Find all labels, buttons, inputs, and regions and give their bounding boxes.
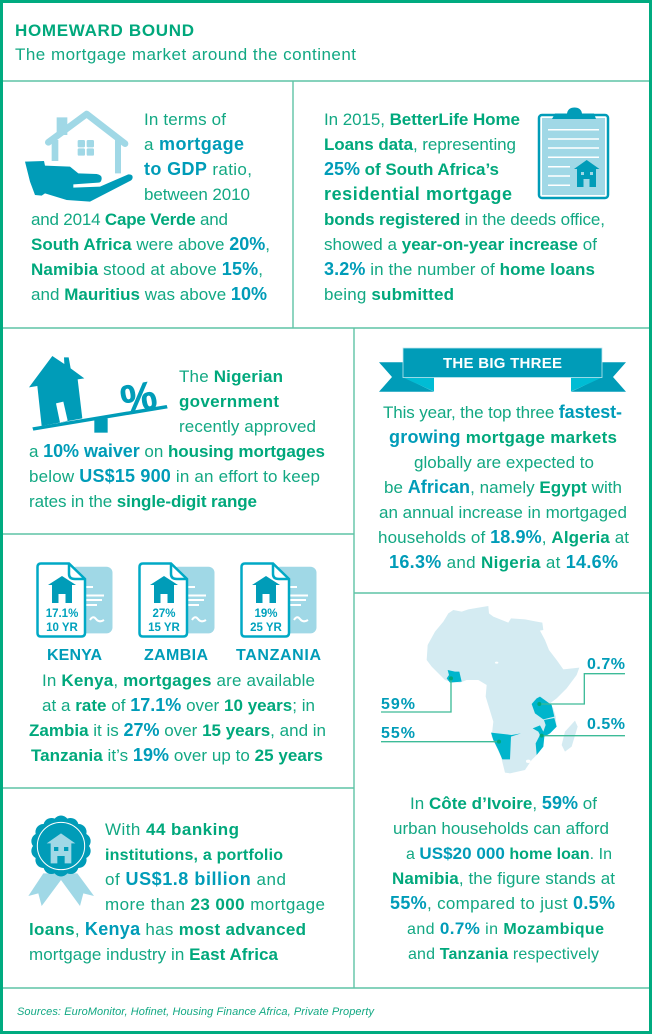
text block: and 0.7% in Mozambique bbox=[407, 919, 604, 938]
text block: growing mortgage markets bbox=[389, 427, 617, 447]
icon: clipboard bbox=[539, 108, 608, 198]
text block: between 2010 bbox=[144, 185, 250, 204]
icon: Tanzania document: 19% bbox=[254, 608, 278, 620]
text block bbox=[324, 110, 605, 304]
text block: a mortgage bbox=[144, 134, 244, 154]
text block: Zambia it is 27% over 15 years, and in bbox=[29, 720, 326, 740]
country labels: TANZANIA bbox=[236, 647, 321, 664]
text block: a 10% waiver on housing mortgages bbox=[29, 441, 325, 461]
icon: Kenya document: 10 YR bbox=[46, 622, 79, 634]
icon: Zambia document: 27% bbox=[152, 608, 176, 620]
text block: and Tanzania respectively bbox=[408, 946, 599, 963]
text block: and 2014 Cape Verde and bbox=[31, 210, 228, 229]
icon: house in hand bbox=[25, 114, 133, 202]
text block: In Kenya, mortgages are available bbox=[42, 671, 315, 690]
text block: globally are expected to bbox=[414, 453, 594, 472]
text block: be African, namely Egypt with bbox=[384, 477, 622, 497]
text block: This year, the top three fastest- bbox=[383, 402, 622, 422]
panel: mortgage to GDP bbox=[25, 110, 270, 304]
text block: Tanzania it’s 19% over up to 25 years bbox=[31, 745, 323, 765]
text block: rates in the single-digit range bbox=[29, 492, 257, 511]
title: HOMEWARD BOUND bbox=[15, 21, 194, 40]
text block: an annual increase in mortgaged bbox=[379, 503, 627, 522]
icon: Zambia document: 15 YR bbox=[148, 622, 181, 634]
text block: residential mortgage bbox=[324, 184, 512, 204]
text block: 25% of South Africa’s bbox=[324, 159, 499, 179]
panel: affordability map bbox=[381, 606, 625, 963]
icon: rosette badge bbox=[28, 816, 94, 906]
title bbox=[15, 21, 356, 64]
text block: showed a year-on-year increase of bbox=[324, 235, 597, 254]
text block: below US$15 900 in an effort to keep bbox=[29, 466, 320, 486]
text block: and Mauritius was above 10% bbox=[31, 284, 267, 304]
text block bbox=[390, 793, 615, 963]
text block: 55%, compared to just 0.5% bbox=[390, 893, 615, 913]
panel: Kenya Zambia Tanzania rates bbox=[29, 564, 326, 765]
text block: Loans data, representing bbox=[324, 135, 516, 154]
icon: house on seesaw: % bbox=[117, 373, 160, 423]
text block: In terms of bbox=[144, 110, 226, 129]
text block: loans, Kenya has most advanced bbox=[29, 919, 306, 939]
text block: households of 18.9%, Algeria at bbox=[378, 527, 629, 547]
text block: bonds registered in the deeds office, bbox=[324, 210, 605, 229]
country labels bbox=[47, 647, 321, 664]
panel: Kenya banking bbox=[28, 816, 325, 964]
text block: more than 23 000 mortgage bbox=[105, 895, 325, 914]
icon: Kenya document bbox=[38, 564, 112, 636]
text block: of US$1.8 billion and bbox=[105, 869, 286, 889]
text block: In 2015, BetterLife Home bbox=[324, 110, 520, 129]
text block bbox=[29, 367, 325, 511]
sources: Sources: EuroMonitor, Hofinet, Housing Finance Africa, Private Property bbox=[17, 1006, 376, 1018]
text block: Namibia, the figure stands at bbox=[392, 869, 615, 888]
banner: the big three bbox=[379, 348, 626, 392]
panel: Nigerian waiver bbox=[29, 356, 325, 511]
icon: Zambia document bbox=[140, 564, 214, 636]
text block bbox=[29, 820, 325, 964]
text block: With 44 banking bbox=[105, 820, 239, 839]
text block: recently approved bbox=[179, 417, 316, 436]
text block: to GDP ratio, bbox=[144, 159, 252, 179]
text block bbox=[378, 402, 629, 572]
chart: map of Africa: 55% bbox=[381, 725, 415, 742]
panel: BetterLife data bbox=[324, 108, 608, 304]
text block: at a rate of 17.1% over 10 years; in bbox=[42, 695, 315, 715]
panel: the big three bbox=[378, 348, 629, 572]
text block: mortgage industry in East Africa bbox=[29, 945, 279, 964]
text block: government bbox=[179, 392, 279, 411]
text block bbox=[31, 110, 270, 304]
banner: the big three: THE BIG THREE bbox=[443, 355, 562, 372]
text block: institutions, a portfolio bbox=[105, 847, 283, 864]
text block: 3.2% in the number of home loans bbox=[324, 259, 595, 279]
title: The mortgage market around the continent bbox=[15, 45, 356, 64]
text block: South Africa were above 20%, bbox=[31, 234, 270, 254]
chart: map of Africa: 0.7% bbox=[587, 656, 625, 673]
text block: The Nigerian bbox=[179, 367, 283, 386]
country labels: KENYA bbox=[47, 647, 102, 664]
text block: Namibia stood at above 15%, bbox=[31, 259, 263, 279]
chart: map of Africa bbox=[381, 606, 625, 773]
text block: being submitted bbox=[324, 285, 454, 304]
icon: Tanzania document: 25 YR bbox=[250, 622, 283, 634]
text block: In Côte d’Ivoire, 59% of bbox=[410, 793, 597, 813]
text block: urban households can afford bbox=[393, 819, 609, 838]
text block bbox=[29, 671, 326, 765]
text block: 16.3% and Nigeria at 14.6% bbox=[389, 552, 618, 572]
text block: a US$20 000 home loan. In bbox=[406, 844, 612, 863]
icon: house on seesaw bbox=[29, 356, 168, 433]
country labels: ZAMBIA bbox=[144, 647, 208, 664]
chart: map of Africa: 0.5% bbox=[587, 716, 625, 733]
chart: map of Africa: 59% bbox=[381, 696, 415, 713]
icon: Tanzania document bbox=[242, 564, 316, 636]
icon: Kenya document: 17.1% bbox=[46, 608, 78, 620]
